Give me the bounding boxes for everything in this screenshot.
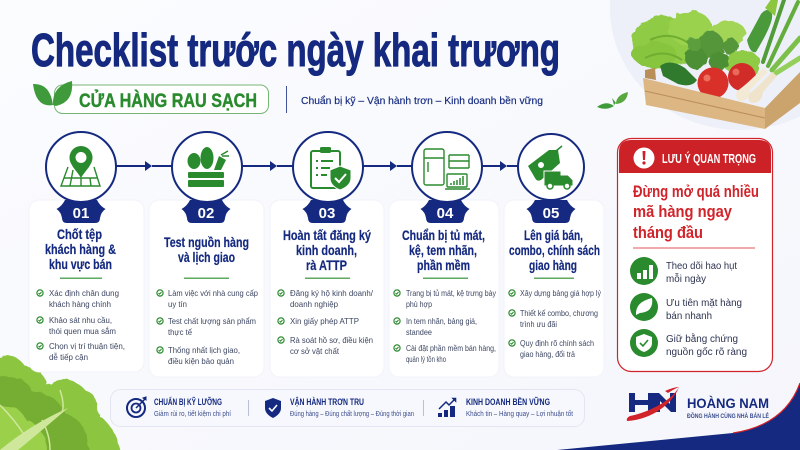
panel: step 1 <box>29 200 144 372</box>
checklist 4: Cài đặt phần mềm bán hàng, <box>406 343 496 353</box>
badge 05 <box>526 200 576 223</box>
subtitle: Chuẩn bị kỹ – Vận hành trơn – Kinh doanh bền vững <box>301 95 543 107</box>
checklist 1: khách hàng chính <box>49 299 111 309</box>
badge 04 <box>420 200 470 223</box>
tip: proof of origin <box>630 329 747 358</box>
step heading 1: Chốt tệp <box>57 226 102 242</box>
footer item 1: CHUẨN BỊ KỸ LƯỠNG <box>154 396 222 407</box>
checklist 1: Khảo sát nhu cầu, <box>49 315 112 325</box>
badge 01 <box>56 200 106 223</box>
step heading 3 <box>283 227 371 273</box>
badge 03 <box>302 200 352 223</box>
tip: track loss <box>630 257 737 285</box>
step heading 4: kệ, tem nhãn, <box>409 242 477 258</box>
footer item 3: KINH DOANH BỀN VỮNG <box>466 397 550 407</box>
logo: ĐỒNG HÀNH CÙNG NHÀ BÁN LẺ <box>687 413 769 420</box>
lettuce bottom-left <box>0 356 122 450</box>
step heading 1: khu vực bán <box>49 256 112 272</box>
checklist 1: dễ tiếp cận <box>49 352 88 362</box>
warning header: LƯU Ý QUAN TRỌNG <box>662 151 756 166</box>
tip: fast sellers: Ưu tiên mặt hàng <box>666 298 742 309</box>
arrow 3 to 4 <box>363 161 412 171</box>
checklist 1: Chọn vị trí thuận tiện, <box>49 341 125 351</box>
tip: fast sellers: bán nhanh <box>666 311 712 322</box>
tip: track loss: mỗi ngày <box>666 272 706 285</box>
checklist 4: In tem nhãn, bảng giá, <box>406 316 477 326</box>
checklist 2: Test chất lượng sản phẩm <box>168 316 256 326</box>
step heading 5: combo, chính sách <box>509 242 600 258</box>
footer item 2: Đúng hàng – Đúng chất lượng – Đúng thời gian <box>290 409 414 418</box>
checklist 2: Thống nhất lịch giao, <box>168 345 240 355</box>
tip: track loss: Theo dõi hao hụt <box>666 261 737 272</box>
icon: fridge, shelf, laptop <box>412 132 482 202</box>
step heading 3: Hoàn tất đăng ký <box>283 227 371 243</box>
checklist 2: uy tín <box>168 299 187 309</box>
logo: HOÀNG NAM <box>687 395 769 411</box>
checklist 3: Xin giấy phép ATTP <box>290 316 359 326</box>
step heading 2: và lịch giao <box>178 249 235 265</box>
panel: warning <box>618 138 772 372</box>
footer item 3: Khách tin – Hàng quay – Lợi nhuận tốt <box>466 409 573 418</box>
step heading 5: giao hàng <box>529 257 577 273</box>
checklist 5: Thiết kế combo, chương <box>520 308 598 318</box>
tip: proof of origin: Giữ bằng chứng <box>666 332 738 345</box>
arrow 4 to 5 <box>482 161 518 171</box>
footer item 1 <box>127 396 231 418</box>
step heading 1 <box>45 226 116 272</box>
checklist 3: cơ sở vật chất <box>290 346 340 356</box>
checklist 4: standee <box>406 327 432 337</box>
footer item 2 <box>265 396 414 418</box>
checklist 3: Đăng ký hộ kinh doanh/ <box>290 288 374 298</box>
step heading 4: phần mềm <box>417 257 470 273</box>
arrow 2 to 3 <box>242 161 294 171</box>
checklist 5: Quy định rõ chính sách <box>520 338 594 348</box>
icon: clipboard with shield <box>293 132 363 202</box>
checklist 2 <box>157 288 258 366</box>
title: Checklist trước ngày khai trương <box>31 24 560 76</box>
vegetable crate illustration <box>633 0 800 129</box>
checklist 1 <box>37 288 125 362</box>
checklist 2: thực tế <box>168 327 192 337</box>
checklist 1: thói quen mua sắm <box>49 326 116 336</box>
checklist 1: Xác định chân dung <box>49 288 119 298</box>
step heading 4 <box>402 227 485 273</box>
footer item 2: VẬN HÀNH TRƠN TRU <box>290 396 364 407</box>
tip: fast sellers <box>630 293 742 322</box>
badge 05: 05 <box>543 205 559 222</box>
badge 04: 04 <box>437 205 454 222</box>
footer item 3 <box>438 397 573 418</box>
step heading 5: Lên giá bán, <box>524 227 583 243</box>
warning headline <box>633 183 759 242</box>
checklist 4 <box>394 288 497 364</box>
bottom-right corner <box>557 383 800 450</box>
badge 02: 02 <box>198 205 214 222</box>
brand pill <box>33 81 268 114</box>
logo <box>627 387 769 421</box>
warning headline: Đừng mở quá nhiều <box>633 183 759 201</box>
step heading 1: khách hàng & <box>45 241 116 257</box>
icon: small leaf <box>597 92 628 109</box>
tip: proof of origin: nguồn gốc rõ ràng <box>666 346 747 358</box>
badge 02 <box>182 200 230 223</box>
footer item 1: Giảm rủi ro, tiết kiệm chi phí <box>154 409 231 418</box>
checklist 4: phù hợp <box>406 299 432 309</box>
panel: step 5 <box>504 200 604 377</box>
checklist 3 <box>278 288 374 356</box>
step heading 4: Chuẩn bị tủ mát, <box>402 227 485 243</box>
step heading 3: kinh doanh, <box>296 242 357 258</box>
checklist 5: giao hàng, đổi trả <box>520 349 575 359</box>
badge 03: 03 <box>319 205 335 222</box>
step heading 3: rà ATTP <box>306 257 347 273</box>
top-right backdrop <box>610 0 800 130</box>
arrow 1 to 2 <box>116 161 172 171</box>
checklist 5 <box>509 288 602 359</box>
panel: step 2 <box>149 200 264 377</box>
panel: step 3 <box>270 200 384 377</box>
brand pill: CỬA HÀNG RAU SẠCH <box>79 90 257 112</box>
badge 01: 01 <box>73 205 89 222</box>
checklist 3: Rà soát hồ sơ, điều kiện <box>290 335 373 345</box>
panel: step 4 <box>389 200 499 377</box>
checklist 2: điều kiện bảo quản <box>168 356 234 366</box>
footer strip <box>110 390 584 426</box>
icon: map pin <box>46 132 116 202</box>
checklist 4: Trang bị tủ mát, kệ trưng bày <box>406 288 497 298</box>
step heading 2 <box>164 234 249 265</box>
step heading 5 <box>509 227 600 273</box>
warning headline: tháng đầu <box>633 224 703 242</box>
checklist 5: Xây dựng bảng giá hợp lý <box>520 288 602 298</box>
warning header <box>619 140 771 173</box>
warning headline: mã hàng ngay <box>633 203 733 221</box>
step heading 2: Test nguồn hàng <box>164 234 249 250</box>
icon: price tag and truck <box>518 134 584 200</box>
checklist 4: quản lý tồn kho <box>406 354 446 364</box>
checklist 5: trình ưu đãi <box>520 319 557 329</box>
icon: produce crate <box>172 132 242 202</box>
checklist 3: doanh nghiệp <box>290 299 338 309</box>
checklist 2: Làm việc với nhà cung cấp <box>168 288 258 298</box>
